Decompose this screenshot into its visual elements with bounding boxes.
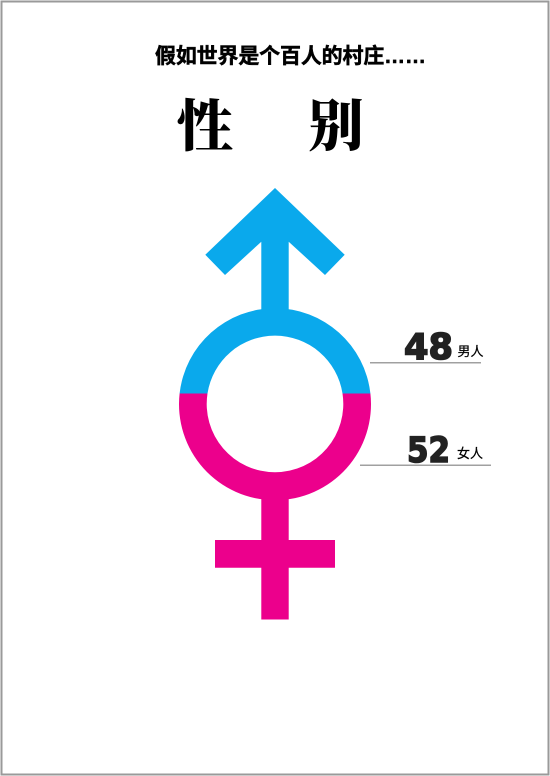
- callout: female 52: [360, 431, 491, 471]
- title: 假如世界是个百人的村庄……: [155, 44, 426, 68]
- heading: gender: [177, 83, 364, 163]
- heading: gender: 性: [177, 83, 233, 163]
- value: 52: 52: [407, 431, 450, 471]
- callout: male 48: [370, 327, 484, 368]
- icon: female symbol in magenta: [179, 394, 371, 620]
- leader line: female: [360, 464, 491, 466]
- value: 48: 48: [404, 327, 453, 368]
- label: male: 男人: [458, 344, 484, 359]
- icon: male symbol in blue: [180, 188, 370, 394]
- leader line: male: [370, 362, 481, 364]
- heading: gender: 别: [308, 83, 364, 163]
- label: female: 女人: [457, 446, 483, 461]
